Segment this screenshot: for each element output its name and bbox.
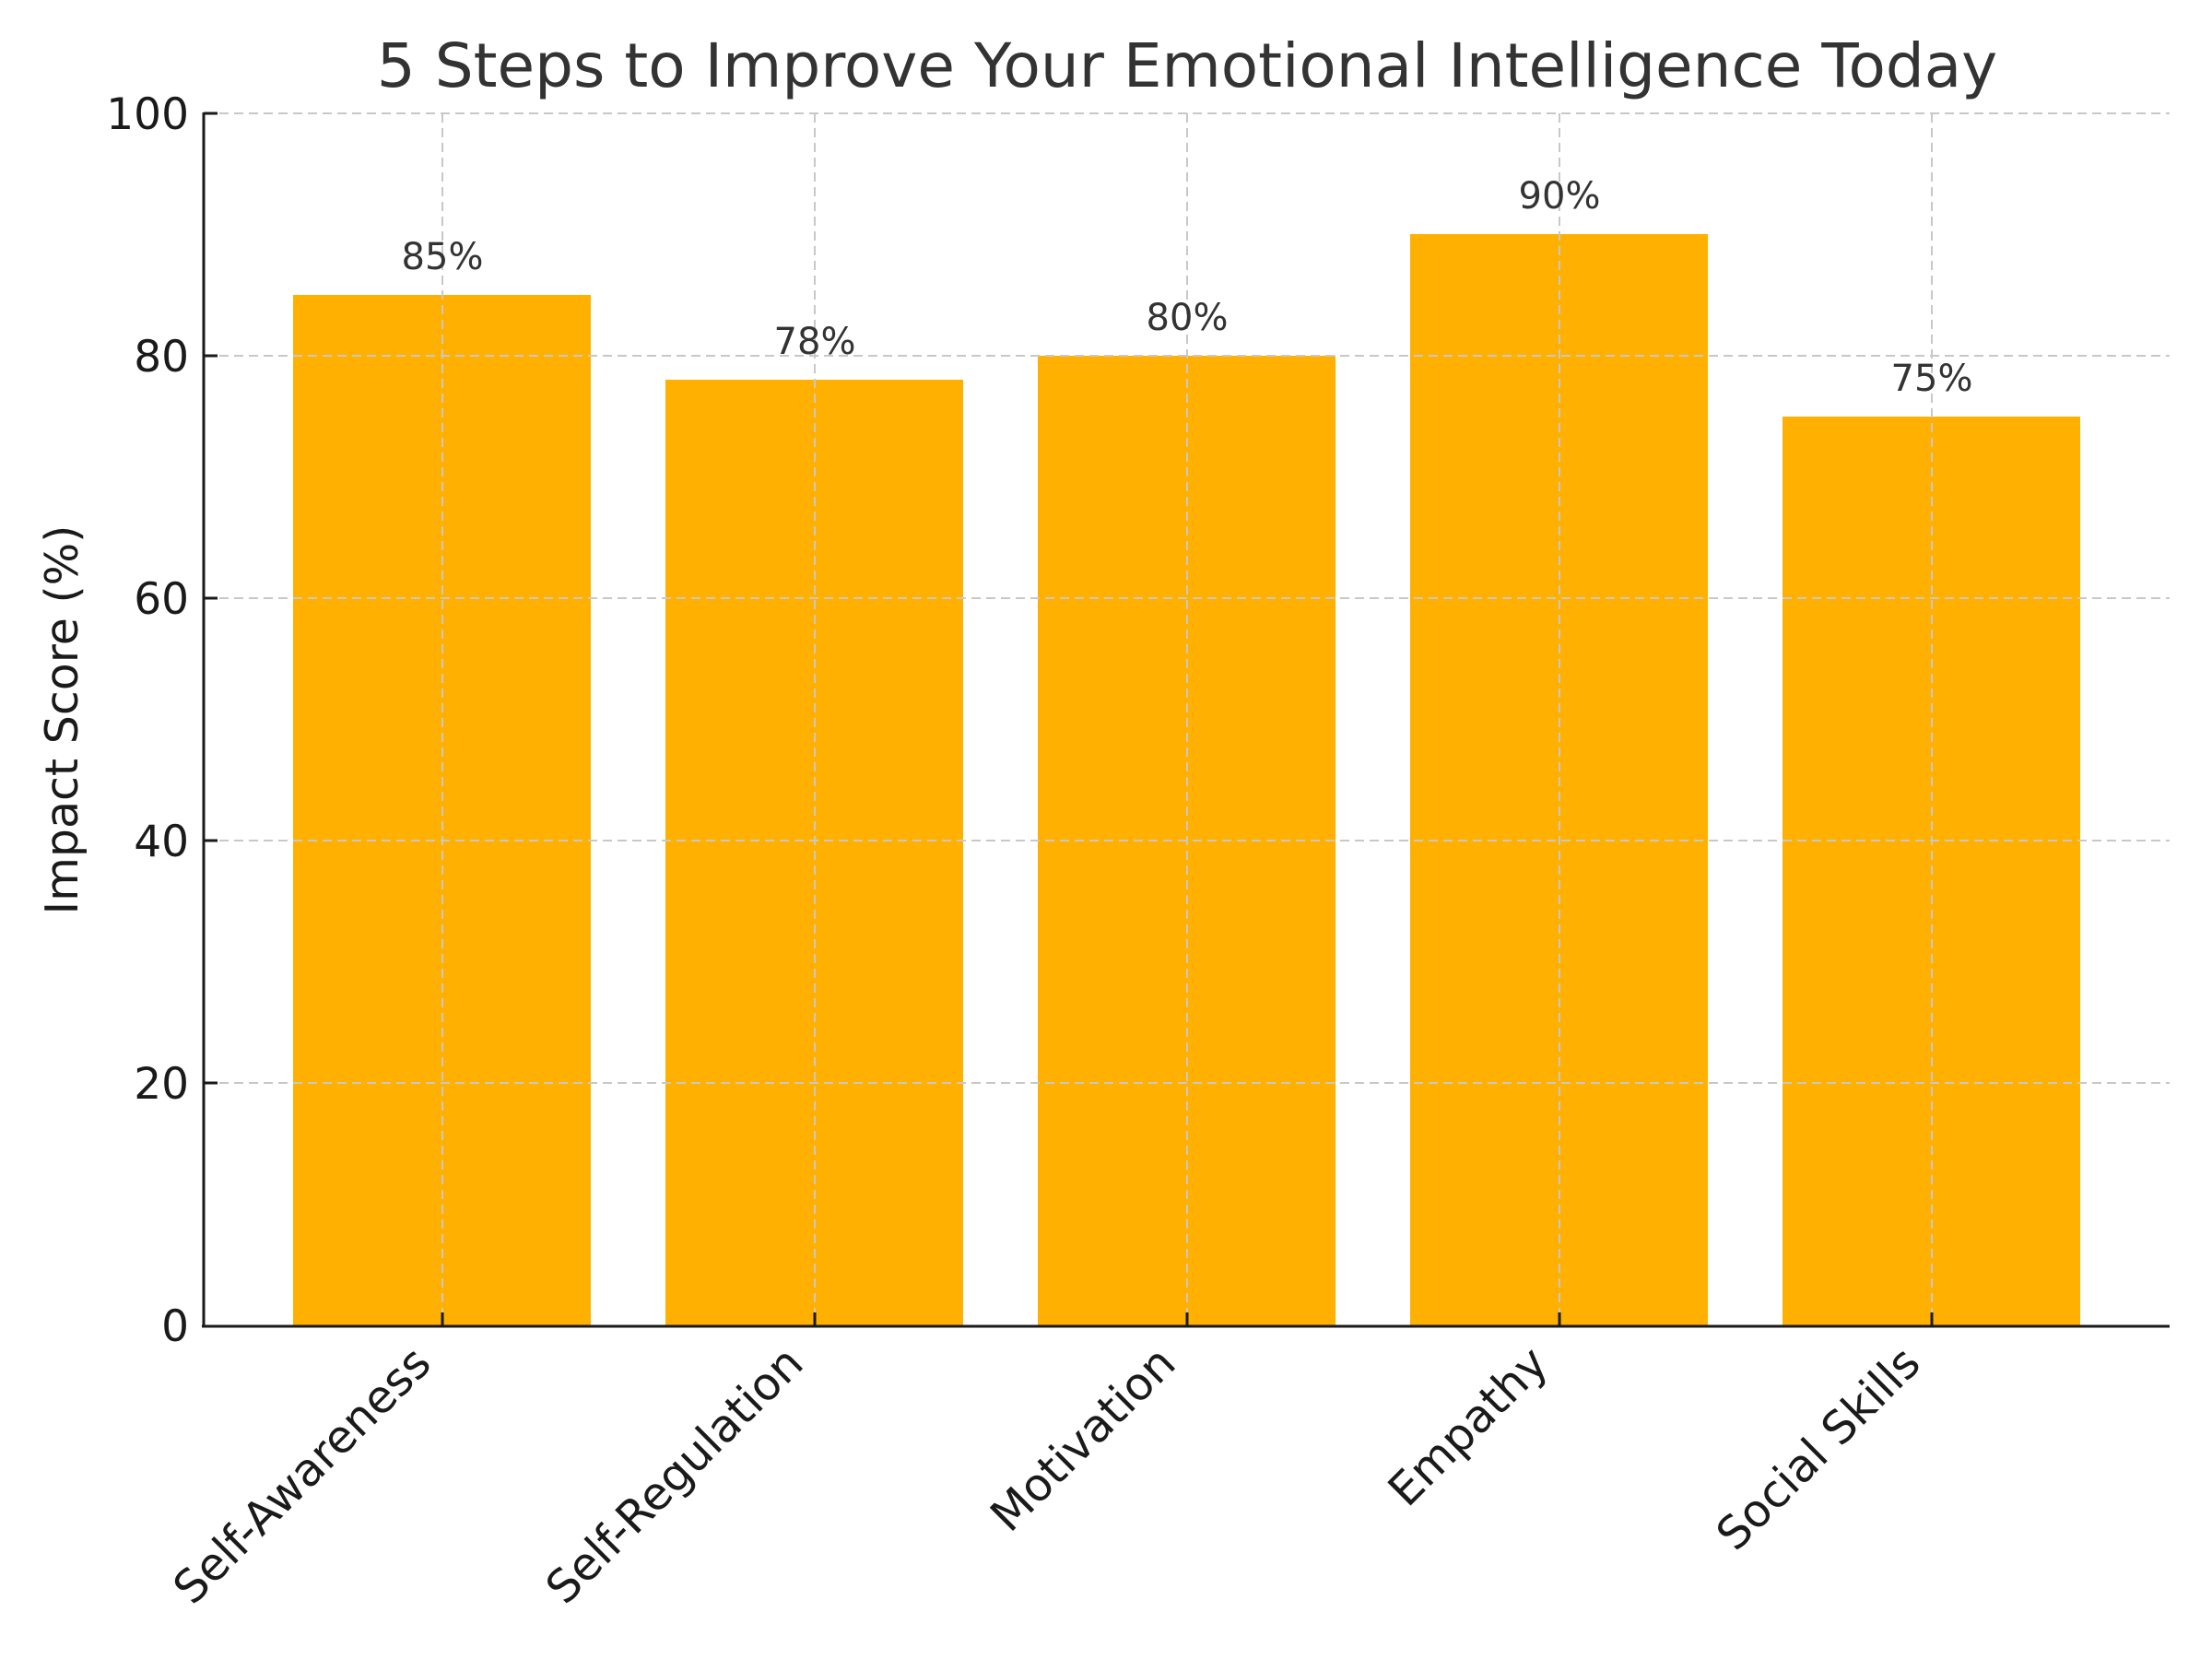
value labels: 85% xyxy=(402,236,483,278)
y tick labels: 80 xyxy=(134,332,189,382)
x tick labels: Social Skills xyxy=(1706,1336,1930,1560)
axes xyxy=(202,112,2170,1327)
value labels: 78% xyxy=(774,321,855,363)
y axis label: Impact Score (%) xyxy=(36,525,88,914)
title: 5 Steps to Improve Your Emotional Intelligence Today xyxy=(377,30,1997,101)
x tick labels: Self-Awareness xyxy=(163,1336,441,1615)
y tick labels: 100 xyxy=(106,89,189,140)
value labels: 75% xyxy=(1891,358,1972,400)
y tick labels: 40 xyxy=(134,817,189,867)
y tick labels xyxy=(106,89,189,1352)
value labels: 90% xyxy=(1519,175,1600,218)
y tick labels: 0 xyxy=(161,1301,189,1352)
value labels: 80% xyxy=(1147,297,1228,339)
y tick labels: 60 xyxy=(134,574,189,625)
x tick labels: Empathy xyxy=(1378,1336,1558,1516)
x tick labels xyxy=(163,1336,1930,1615)
x tick labels: Self-Regulation xyxy=(535,1336,813,1614)
x tick labels: Motivation xyxy=(981,1336,1185,1542)
value labels xyxy=(402,175,1972,400)
y tick labels: 20 xyxy=(134,1059,189,1110)
bars xyxy=(293,234,2080,1325)
